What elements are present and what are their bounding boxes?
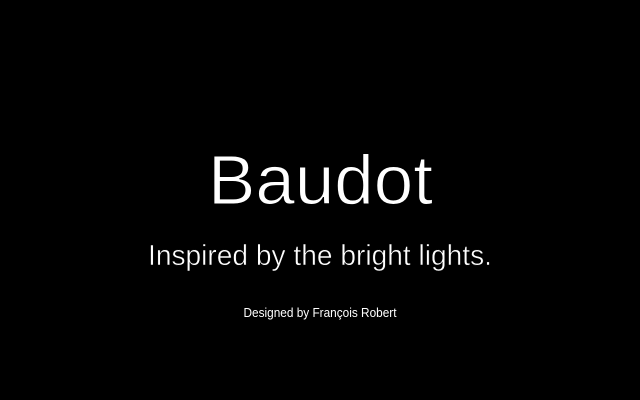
designer credit: Designed by François Robert: [244, 306, 397, 320]
title: Baudot: [208, 141, 433, 219]
tagline: Inspired by the bright lights.: [148, 240, 492, 272]
